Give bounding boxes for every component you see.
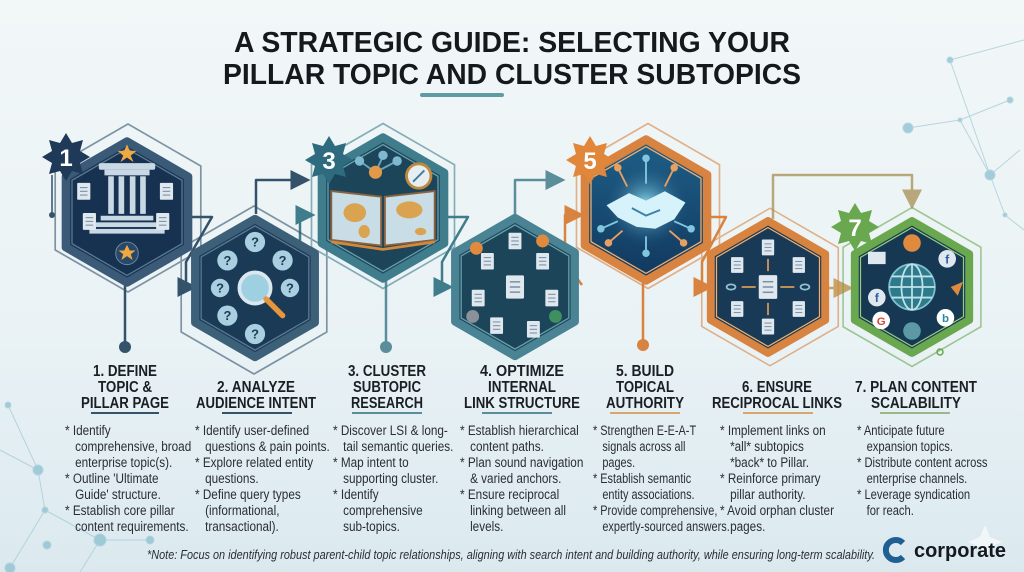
text column 2: * Define query types bbox=[195, 486, 301, 502]
text column 7: for reach. bbox=[867, 503, 914, 518]
text column 4: * Ensure reciprocal bbox=[460, 486, 559, 502]
icon: documents network bbox=[759, 275, 777, 299]
icon: magnifier with questions: ? bbox=[279, 253, 287, 268]
badge 5 bbox=[566, 136, 614, 184]
heading 3: SUBTOPIC bbox=[353, 379, 421, 396]
sparkle decoration bbox=[968, 525, 1002, 559]
icon: magnifier with questions: ? bbox=[251, 235, 259, 250]
text column 1: * Establish core pillar bbox=[65, 502, 175, 518]
icon: magnifier with questions: ? bbox=[251, 327, 259, 342]
icon: magnifier with questions bbox=[211, 232, 299, 344]
badge 1 bbox=[42, 133, 90, 181]
text column 2: (informational, bbox=[205, 502, 279, 518]
text column 1 bbox=[65, 422, 191, 534]
heading 3: RESEARCH bbox=[351, 395, 423, 412]
heading 7 bbox=[855, 379, 977, 414]
text column 1: Guide' structure. bbox=[75, 486, 161, 502]
text column 2: transactional). bbox=[205, 518, 279, 534]
hexagon 6: reciprocal links bbox=[711, 221, 825, 353]
text column 6: *all* subtopics bbox=[730, 438, 804, 454]
heading 7: 7. PLAN CONTENT bbox=[855, 379, 977, 396]
text column 2: * Explore related entity bbox=[195, 454, 314, 470]
text column 1: comprehensive, broad bbox=[75, 438, 191, 454]
text column 7: expansion topics. bbox=[867, 439, 953, 454]
background network: top right bbox=[903, 40, 1024, 230]
heading 1: 1. DEFINE bbox=[93, 363, 157, 380]
icon: handshake bbox=[604, 163, 688, 248]
text column 5: * Establish semantic bbox=[593, 471, 691, 486]
heading 1 bbox=[81, 363, 169, 414]
text column 2: questions & pain points. bbox=[205, 438, 330, 454]
text column 6: * Implement links on bbox=[720, 422, 826, 438]
hexagon 4: internal links bbox=[455, 218, 575, 356]
badge 5: 5 bbox=[583, 148, 597, 175]
title: PILLAR TOPIC AND CLUSTER SUBTOPICS bbox=[223, 59, 801, 91]
text column 5: pages. bbox=[602, 455, 635, 470]
heading 2: 2. ANALYZE bbox=[217, 379, 295, 396]
heading 7: SCALABILITY bbox=[871, 395, 961, 412]
heading 2 bbox=[196, 379, 316, 414]
title bbox=[223, 27, 801, 97]
heading 4 bbox=[464, 363, 580, 414]
hexagon 7: scalability bbox=[855, 221, 969, 353]
hexagon 7: scalability: f bbox=[875, 291, 880, 305]
hexagon 1: pillar page bbox=[66, 142, 188, 282]
text column 6: * Avoid orphan cluster bbox=[720, 502, 835, 518]
text column 5: entity associations. bbox=[602, 487, 695, 502]
hexagon 3: cluster research bbox=[322, 138, 444, 278]
text column 6: pillar authority. bbox=[730, 486, 806, 502]
badge 3 bbox=[305, 136, 353, 184]
icon: magnifier with questions: ? bbox=[223, 253, 231, 268]
heading 1: PILLAR PAGE bbox=[81, 395, 169, 412]
text column 1: content requirements. bbox=[75, 518, 189, 534]
text column 6: pages. bbox=[730, 518, 765, 534]
text column 1: * Outline 'Ultimate bbox=[65, 470, 159, 486]
text column 4: * Plan sound navigation bbox=[460, 454, 583, 470]
text column 3: tail semantic queries. bbox=[343, 438, 453, 454]
text column 2 bbox=[195, 422, 330, 534]
text column 6 bbox=[720, 422, 835, 534]
heading 5: AUTHORITY bbox=[606, 395, 684, 412]
heading 4: INTERNAL bbox=[488, 379, 556, 396]
heading 4: 4. OPTIMIZE bbox=[480, 363, 564, 380]
text column 2: * Identify user-defined bbox=[195, 422, 309, 438]
badge 1: 1 bbox=[59, 145, 73, 172]
heading 1: TOPIC & bbox=[98, 379, 152, 396]
background network: bottom left bbox=[0, 402, 154, 572]
text column 1: enterprise topic(s). bbox=[75, 454, 172, 470]
text column 4: content paths. bbox=[470, 438, 544, 454]
text column 3: * Map intent to bbox=[333, 454, 409, 470]
heading 3: 3. CLUSTER bbox=[348, 363, 426, 380]
heading 6: RECIPROCAL LINKS bbox=[712, 395, 842, 412]
hexagon 7: scalability: G bbox=[877, 316, 886, 328]
text column 3: * Discover LSI & long- bbox=[333, 422, 448, 438]
text column 4: levels. bbox=[470, 518, 503, 534]
heading 6: 6. ENSURE bbox=[742, 379, 812, 396]
connectors bbox=[52, 175, 912, 347]
text column 5: signals across all bbox=[602, 439, 685, 454]
icon: pillar bbox=[89, 163, 165, 234]
text column 6: *back* to Pillar. bbox=[730, 454, 809, 470]
text column 6: * Reinforce primary bbox=[720, 470, 821, 486]
text column 7: * Leverage syndication bbox=[857, 487, 970, 502]
text column 3: sub-topics. bbox=[343, 518, 400, 534]
heading 6 bbox=[712, 379, 842, 414]
text column 7: enterprise channels. bbox=[867, 471, 967, 486]
icon: book with map bbox=[331, 191, 381, 246]
hexagon 7: scalability: f bbox=[945, 252, 950, 266]
logo: corporate: corporate bbox=[914, 540, 1006, 562]
text column 3 bbox=[333, 422, 453, 534]
heading 3 bbox=[348, 363, 426, 414]
text column 5 bbox=[593, 423, 730, 534]
badge 3: 3 bbox=[322, 148, 336, 175]
hexagon 2: audience intent bbox=[195, 219, 315, 357]
icon: linked documents bbox=[506, 275, 524, 299]
title: A STRATEGIC GUIDE: SELECTING YOUR bbox=[234, 27, 790, 59]
badge 7: 7 bbox=[848, 215, 862, 242]
text column 4: & varied anchors. bbox=[470, 470, 561, 486]
outer faint outlines bbox=[55, 124, 981, 374]
heading 5: TOPICAL bbox=[616, 379, 674, 396]
text column 7: * Distribute content across bbox=[857, 455, 988, 470]
text column 4 bbox=[460, 422, 583, 534]
icon: magnifier with questions: ? bbox=[223, 308, 231, 323]
text column 3: supporting cluster. bbox=[343, 470, 438, 486]
icon: globe and channels bbox=[889, 264, 935, 310]
text column 3: comprehensive bbox=[343, 502, 423, 518]
hexagon 5: topical authority bbox=[585, 140, 707, 280]
text column 5: * Provide comprehensive, bbox=[593, 503, 717, 518]
text column 1: * Identify bbox=[65, 422, 111, 438]
footnote: *Note: Focus on identifying robust parent-child topic relationships, aligning with search intent and building authority, while ensuring long-term scalability. bbox=[147, 547, 875, 562]
icon: magnifier with questions: ? bbox=[286, 281, 294, 296]
text column 4: * Establish hierarchical bbox=[460, 422, 579, 438]
icon: magnifier with questions: ? bbox=[216, 281, 224, 296]
heading 2: AUDIENCE INTENT bbox=[196, 395, 316, 412]
heading 4: LINK STRUCTURE bbox=[464, 395, 580, 412]
text column 7 bbox=[857, 423, 988, 518]
badge 7 bbox=[831, 203, 879, 251]
hexagon 7: scalability: b bbox=[942, 313, 949, 325]
text column 5: expertly-sourced answers. bbox=[602, 519, 730, 534]
heading 5 bbox=[606, 363, 684, 414]
text column 7: * Anticipate future bbox=[857, 423, 945, 438]
text column 2: questions. bbox=[205, 470, 259, 486]
text column 3: * Identify bbox=[333, 486, 379, 502]
heading 5: 5. BUILD bbox=[616, 363, 674, 380]
text column 4: linking between all bbox=[470, 502, 566, 518]
text column 5: * Strengthen E-E-A-T bbox=[593, 423, 696, 438]
